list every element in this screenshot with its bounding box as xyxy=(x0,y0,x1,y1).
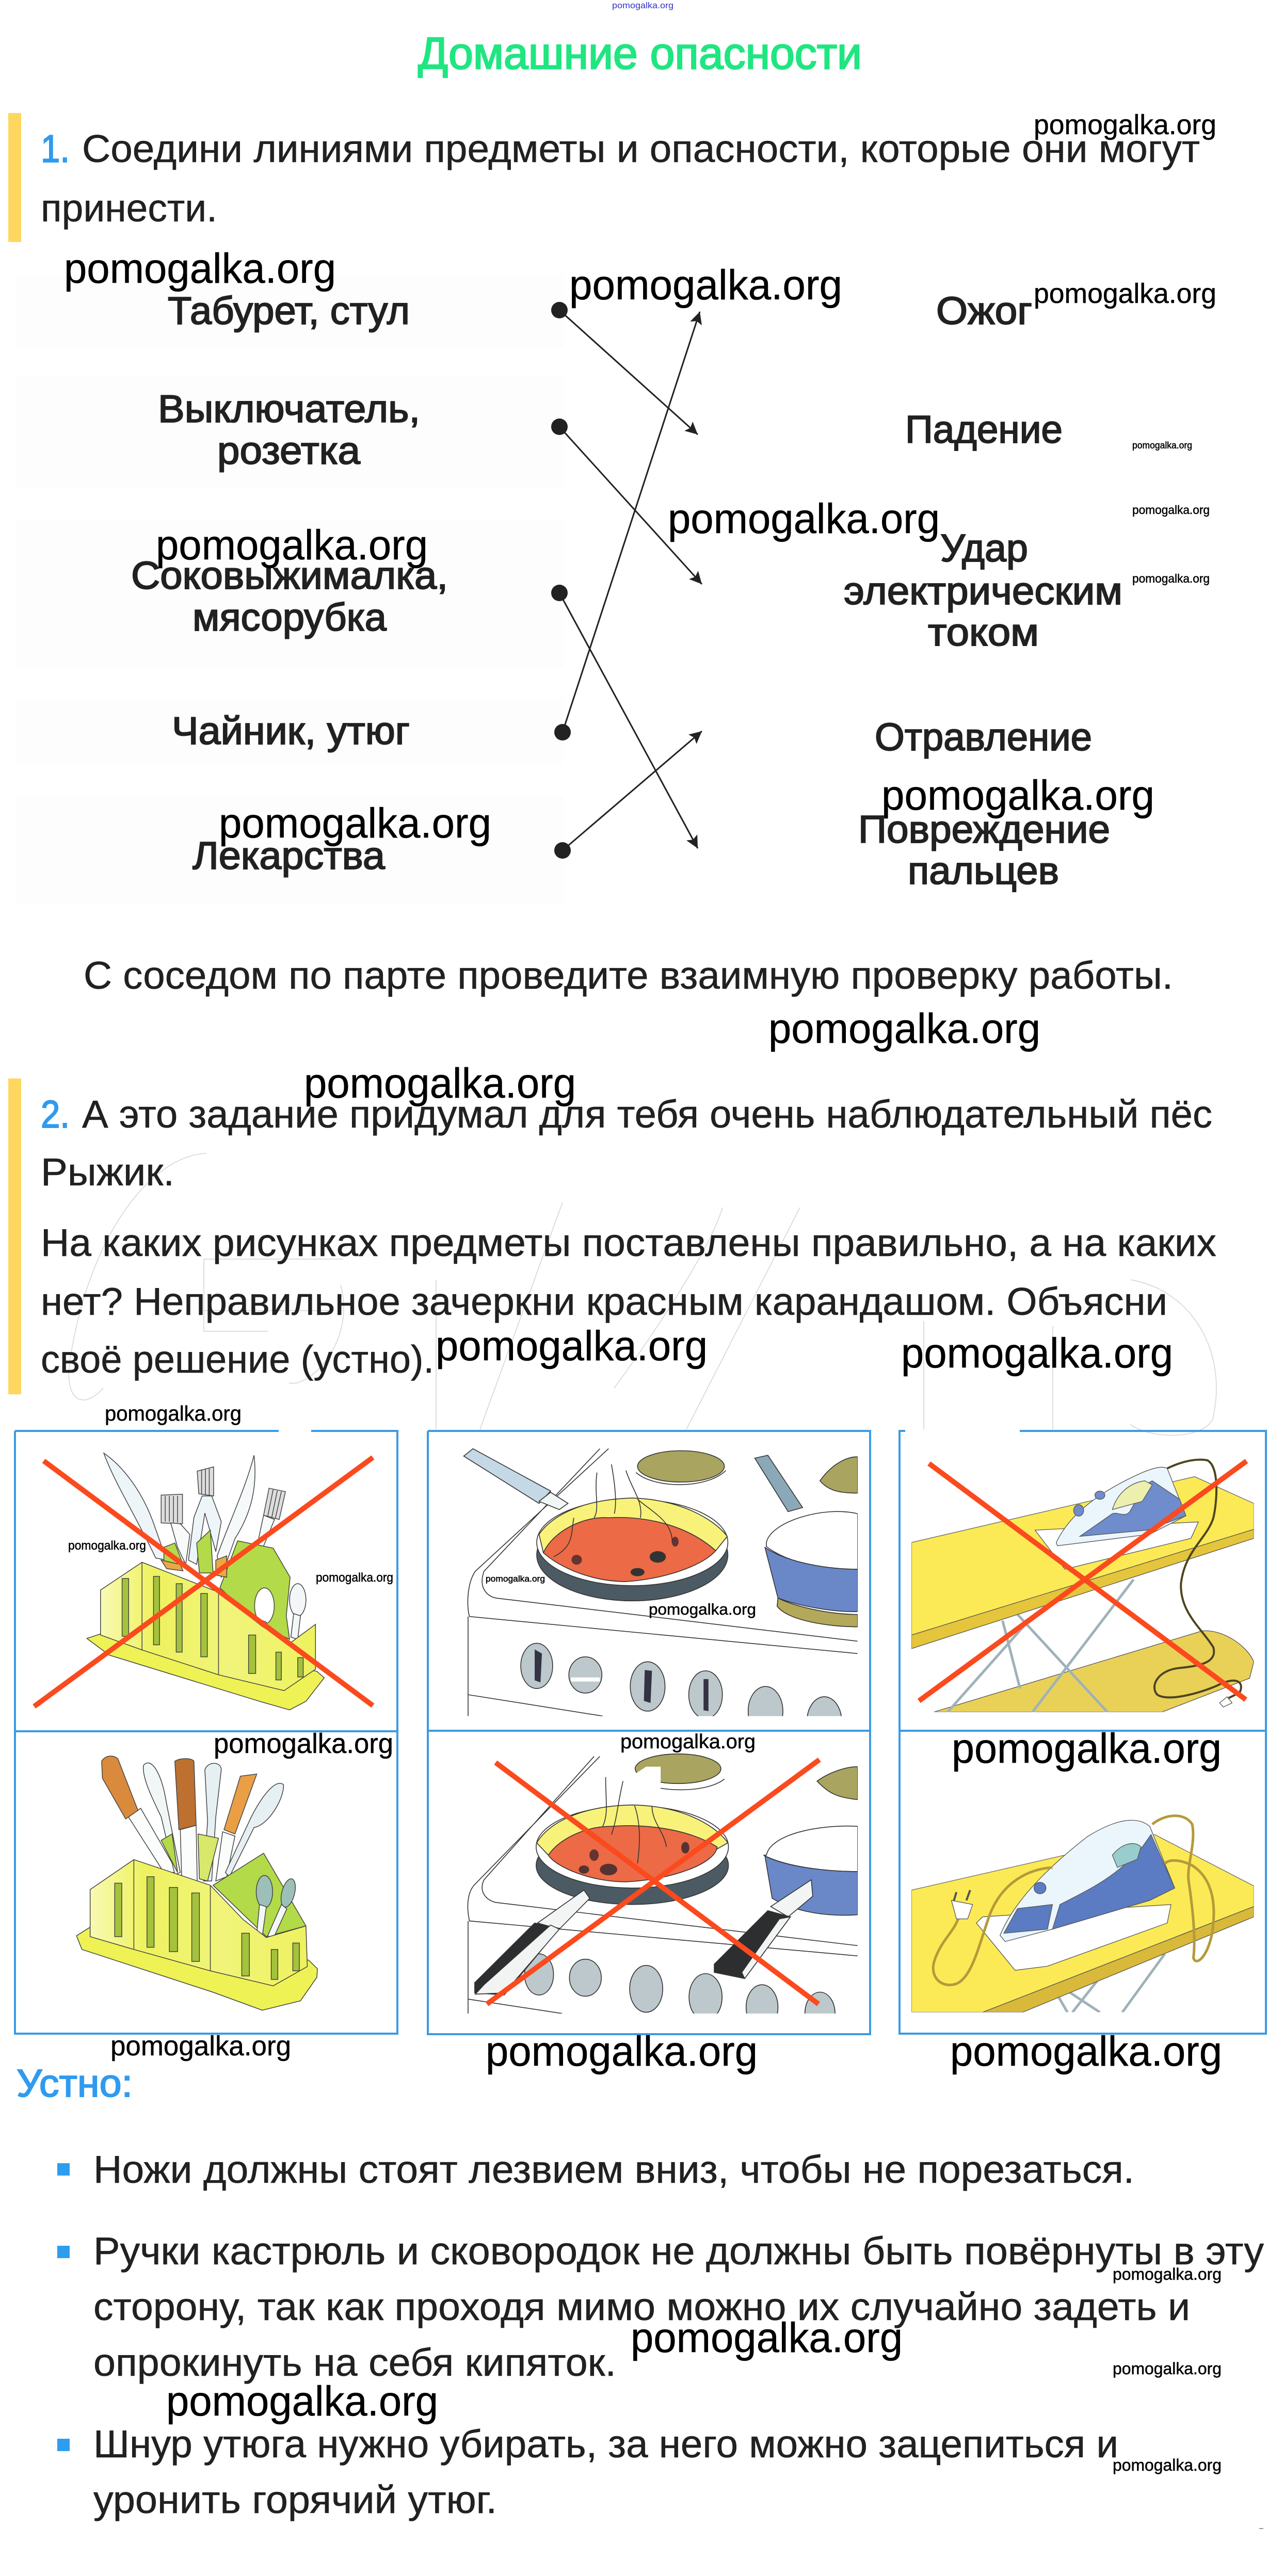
title: Домашние опасности xyxy=(418,29,862,78)
task number 2: 2. xyxy=(41,1092,70,1136)
pomogalka.org watermarks: pomogalka.org xyxy=(486,1574,545,1584)
danger: shock line 1: Удар xyxy=(940,526,1028,570)
bullet 3 line 2: уронить горячий утюг. xyxy=(93,2478,497,2521)
bullet 2 marker xyxy=(57,2246,70,2258)
pomogalka.org watermarks: pomogalka.org xyxy=(64,245,336,292)
pomogalka.org watermarks: pomogalka.org xyxy=(1113,2359,1222,2378)
pomogalka.org watermarks: pomogalka.org xyxy=(436,1323,708,1370)
pomogalka.org watermarks: pomogalka.org xyxy=(105,1402,242,1425)
item: stool: Табурет, стул xyxy=(168,289,410,332)
danger: finger injury line 1: Повреждение xyxy=(858,808,1110,851)
illustration: iron with cord tidied xyxy=(911,1816,1254,2013)
pomogalka.org watermarks: pomogalka.org xyxy=(952,1725,1222,1772)
panel: frying pan pictures xyxy=(428,1431,870,2035)
illustration: iron with loose cord xyxy=(911,1460,1254,1712)
pomogalka.org watermarks: pomogalka.org xyxy=(486,2028,758,2075)
bullet 1 marker xyxy=(57,2163,70,2176)
red cross 3 xyxy=(919,1461,1246,1701)
pomogalka.org watermarks: pomogalka.org xyxy=(316,1571,393,1585)
yellow accent bar xyxy=(8,113,21,242)
oral answer heading: Устно: xyxy=(17,2062,133,2105)
frame xyxy=(428,1431,870,2034)
item: juicer line 2: мясорубка xyxy=(192,595,387,639)
pomogalka.org watermarks: pomogalka.org xyxy=(768,1005,1040,1052)
item: switch line 2: розетка xyxy=(217,429,360,472)
task 2 text line 5: своё решение (устно). xyxy=(41,1338,434,1381)
danger: fall: Падение xyxy=(905,408,1063,451)
panel: cutlery pictures xyxy=(15,1431,397,2034)
panel: matching exercise xyxy=(17,275,1122,903)
panel: iron pictures xyxy=(900,1431,1266,2034)
pomogalka.org watermarks: pomogalka.org xyxy=(1034,109,1216,140)
item: juicer line 1: Соковыжималка, xyxy=(131,554,448,597)
task 2 text line 1: А это задание придумал для тебя очень наблюдательный пёс xyxy=(82,1092,1212,1136)
danger: burn: Ожог xyxy=(936,289,1032,332)
item: medicine: Лекарства xyxy=(192,834,385,877)
pomogalka.org watermarks: pomogalka.org xyxy=(110,2031,291,2062)
connecting arrows xyxy=(559,310,702,850)
pomogalka.org watermarks: pomogalka.org xyxy=(950,2028,1222,2075)
watermark on cutlery: pomogalka.org xyxy=(68,1539,146,1553)
illustration: stove, handles turned away xyxy=(464,1448,858,1746)
item: switch line 1: Выключатель, xyxy=(158,387,420,430)
item: kettle: Чайник, утюг xyxy=(172,709,410,752)
illustration: cutlery handles up xyxy=(76,1756,317,2010)
pomogalka.org watermarks: pomogalka.org xyxy=(631,2314,903,2361)
pomogalka.org watermarks: pomogalka.org xyxy=(901,1330,1173,1377)
pomogalka.org watermarks: pomogalka.org xyxy=(668,495,940,542)
pomogalka.org watermarks: pomogalka.org xyxy=(214,1728,393,1759)
danger: finger injury line 2: пальцев xyxy=(908,849,1059,892)
illustration: cutlery blades up, crossed out xyxy=(87,1453,324,1710)
task number 1: 1. xyxy=(41,127,70,170)
pomogalka.org watermarks: pomogalka.org xyxy=(156,522,428,569)
left row backgrounds xyxy=(17,275,564,903)
bullet 3 line 1: Шнур утюга нужно убирать, за него можно зацепиться и xyxy=(93,2422,1118,2466)
pomogalka.org watermarks: pomogalka.org xyxy=(1132,572,1210,585)
faint background watermark outlines xyxy=(69,1153,1216,1435)
danger: shock line 2: электрическим xyxy=(844,569,1122,613)
red cross 1 xyxy=(34,1457,373,1706)
task 1 text line 1: Соедини линиями предметы и опасности, которые они могут xyxy=(82,127,1200,170)
pomogalka.org watermarks: pomogalka.org xyxy=(569,262,842,309)
bullet list xyxy=(57,2148,1264,2521)
panel: task 1 heading xyxy=(8,113,1200,242)
pomogalka.org watermarks: pomogalka.org xyxy=(881,772,1154,819)
task 2 text line 3: На каких рисунках предметы поставлены правильно, а на каких xyxy=(41,1221,1216,1264)
pomogalka.org watermarks: pomogalka.org xyxy=(1113,2265,1222,2283)
illustration: stove, handles turned out xyxy=(468,1754,858,2035)
pomogalka.org watermarks: pomogalka.org xyxy=(304,1060,576,1107)
tiny speck xyxy=(1259,2528,1263,2529)
bullet 1 text: Ножи должны стоят лезвием вниз, чтобы не порезаться. xyxy=(93,2148,1134,2191)
danger: poisoning: Отравление xyxy=(875,715,1092,759)
pomogalka.org watermarks: pomogalka.org xyxy=(166,2378,438,2425)
danger: shock line 3: током xyxy=(928,610,1039,654)
red cross 2 xyxy=(487,1760,820,2004)
pomogalka.org watermarks: pomogalka.org xyxy=(620,1731,756,1753)
bullet 2 line 1: Ручки кастрюль и сковородок не должны быть повёрнуты в эту xyxy=(93,2229,1264,2273)
task 2 text line 4: нет? Неправильное зачеркни красным карандашом. Объясни xyxy=(41,1280,1167,1323)
bullet 2 line 3: опрокинуть на себя кипяток. xyxy=(93,2341,616,2384)
bullet 2 line 2: сторону, так как проходя мимо можно их случайно задеть и xyxy=(93,2285,1190,2328)
top small link: pomogalka.org xyxy=(612,1,673,10)
frame xyxy=(900,1431,1266,2034)
panel: task 2 heading xyxy=(8,1078,1216,1394)
pomogalka.org watermarks: pomogalka.org xyxy=(1113,2456,1222,2474)
yellow accent bar xyxy=(8,1078,21,1394)
task 1 text line 2: принести. xyxy=(41,186,217,230)
pomogalka.org watermarks: pomogalka.org xyxy=(219,800,491,847)
pomogalka.org watermarks: pomogalka.org xyxy=(1132,503,1210,517)
pomogalka.org watermarks: pomogalka.org xyxy=(649,1600,756,1618)
task 2 text line 2: Рыжик. xyxy=(41,1150,174,1194)
pomogalka.org watermarks: pomogalka.org xyxy=(1132,440,1192,450)
arrow start dots xyxy=(551,302,571,859)
frame xyxy=(15,1431,397,2034)
bullet 3 marker xyxy=(57,2439,70,2451)
peer check sentence: С соседом по парте проведите взаимную проверку работы. xyxy=(84,954,1173,997)
pomogalka.org watermarks: pomogalka.org xyxy=(1034,278,1216,309)
